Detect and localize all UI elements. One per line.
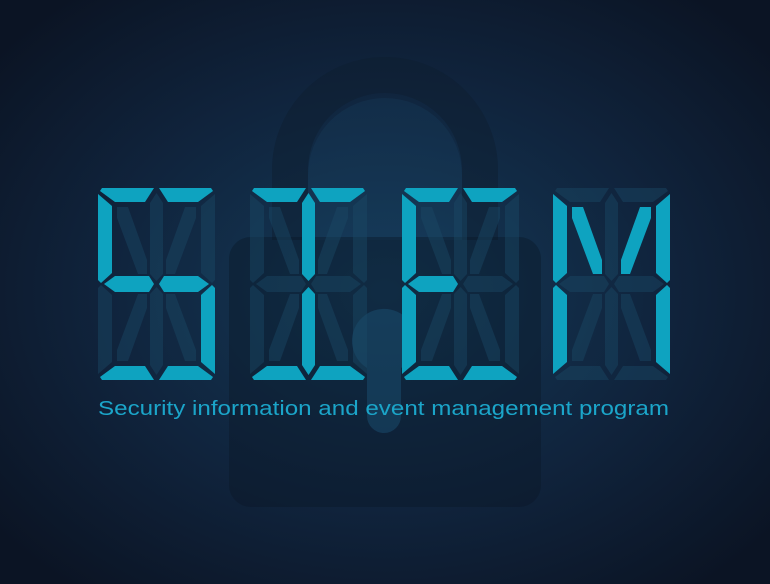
letter S [98,188,215,380]
icon: padlock watermark [229,75,541,507]
letter M [553,188,670,380]
subtitle: Security information and event management program [98,398,669,420]
letter E [402,188,519,380]
letter I [250,188,367,380]
display: SIEM letters [98,188,670,380]
